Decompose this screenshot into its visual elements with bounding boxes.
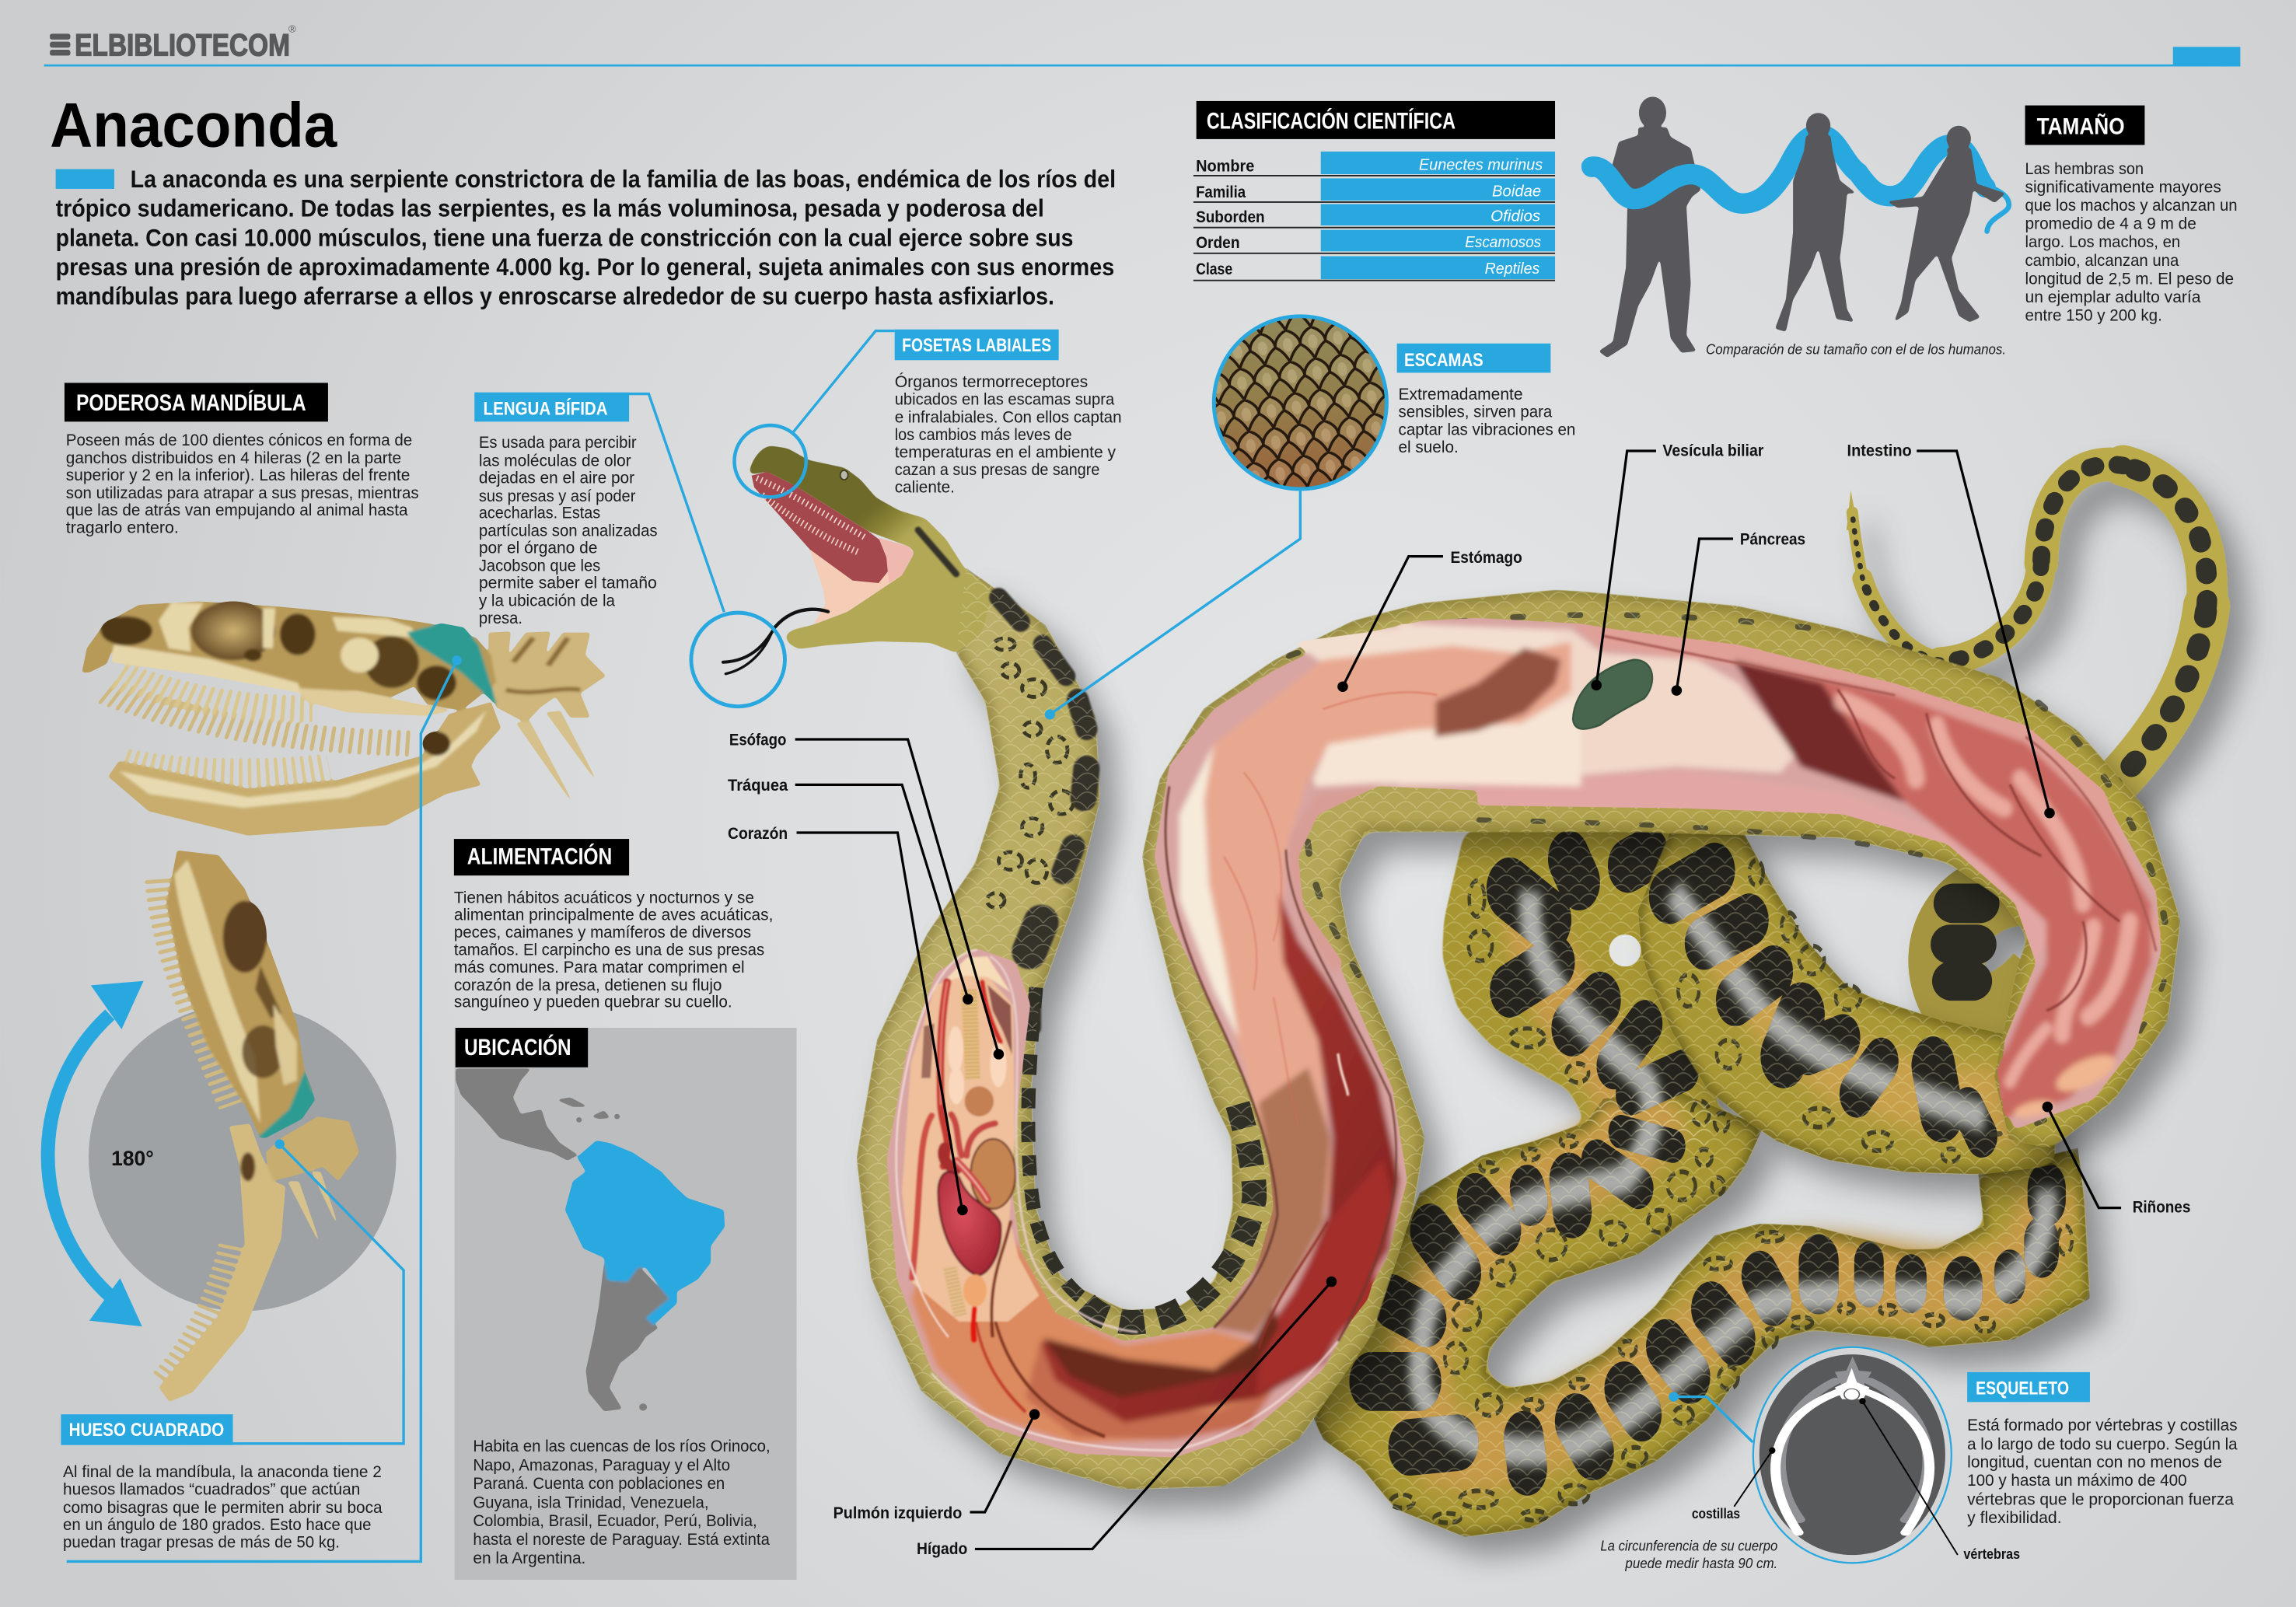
gallbladder: [1573, 659, 1652, 729]
rotation disc: [89, 1004, 396, 1311]
right body tissues: [1399, 624, 2161, 1120]
tamaño text: longitud de 2,5 m. El peso de: [2025, 269, 2234, 288]
label: hígado: Hígado: [917, 1540, 967, 1558]
front body ribbon: [857, 568, 2180, 1489]
fosetas heading: [895, 330, 1059, 360]
map: habitat range: [565, 1141, 725, 1325]
warm spine: [1693, 873, 2020, 1108]
membrane bright line: [896, 950, 977, 1337]
label: intestino: [1847, 442, 2055, 819]
eye socket: [191, 601, 275, 660]
palate: [752, 472, 889, 583]
upper cream tissue: [943, 956, 1011, 993]
quadrate open leader: [233, 1140, 404, 1444]
lengua text: Es usada para percibir: [479, 433, 637, 452]
panel: escamas: [1045, 316, 1575, 720]
lengua heading text: LENGUA BÍFIDA: [484, 398, 608, 420]
lower tooth row: [124, 763, 330, 773]
mandíbula text: que las de atrás van empujando al animal hasta: [66, 501, 408, 519]
tamaño text: entre 150 y 200 kg.: [2025, 306, 2162, 324]
intro text: planeta. Con casi 10.000 músculos, tiene una fuerza de constricción con la cual ejerce sobre sus: [56, 224, 1073, 251]
membrane right line: [990, 956, 1138, 1332]
upper teeth: [757, 478, 865, 538]
lower cavity shade: [1026, 1342, 1274, 1440]
label: vesícula biliar: Vesícula biliar: [1662, 442, 1763, 460]
mandíbula text: tragarlo entero.: [66, 518, 179, 536]
lower stomach shade: [1214, 1067, 1330, 1335]
lower jaw highlight: [119, 711, 486, 808]
skull socket shades: [223, 901, 284, 1078]
fosetas text: caliente.: [895, 478, 955, 497]
scale texture: [1638, 826, 2055, 1174]
escamas text: captar las vibraciones en: [1399, 420, 1575, 438]
hueso text: Al final de la mandíbula, la anaconda tiene 2: [63, 1462, 382, 1481]
ubicación text: Habita en las cuencas de los ríos Orinoco,: [473, 1437, 771, 1455]
intestine folds: [1843, 701, 2130, 1082]
upper teeth: [162, 879, 234, 1105]
table rows: Clase: [1196, 260, 1232, 278]
map: caribbean islands: [556, 1097, 620, 1123]
panel: hueso cuadrado: [48, 851, 404, 1552]
label: esófago: [729, 732, 1004, 1060]
cross-section caption: puede medir hasta 90 cm.: [1624, 1556, 1777, 1571]
panel: esqueleto: [1600, 1347, 2238, 1571]
great vessel: [943, 1148, 987, 1200]
table rows: [1193, 152, 1555, 281]
lower coil strand: [1314, 830, 2090, 1537]
skull bright patch: [274, 1004, 297, 1085]
intro bullet: [56, 169, 114, 189]
alimentación heading text: ALIMENTACIÓN: [467, 843, 612, 869]
blotch highlights: [1420, 892, 2046, 1451]
jaw socket open: [240, 1152, 255, 1181]
heading text: CLASIFICACIÓN CIENTÍFICA: [1207, 108, 1456, 134]
intro text: trópico sudamericano. De todas las serpientes, es la más voluminosa, pesada y poderosa del: [56, 195, 1044, 222]
hueso heading: [61, 1414, 233, 1445]
front tooth row: [119, 676, 313, 709]
stomach: [1204, 642, 1571, 1335]
quadrate teal open: [258, 1071, 315, 1138]
neck rosette spots: [987, 638, 1073, 908]
label: costillas: [1692, 1448, 1775, 1521]
panel: tamaño comparison: [1581, 96, 2238, 358]
strand body: [1314, 830, 2090, 1537]
table rows: Escamosos: [1465, 234, 1541, 251]
ubicación text: hasta el noreste de Paraguay. Está extinta: [473, 1530, 770, 1549]
chest cavity: [902, 974, 1040, 1322]
angle label: 180°: [111, 1147, 154, 1170]
lower jaw open: [159, 1123, 285, 1402]
hole in coil: [1609, 935, 1641, 966]
fosetas text: [895, 372, 1122, 497]
heart: [938, 1172, 1001, 1276]
hueso text: como bisagras que le permiten abrir su boca: [63, 1498, 383, 1517]
eye: [840, 470, 848, 480]
kidneys: [2013, 1047, 2119, 1120]
mandíbula text: ganchos distribuidos en 4 hileras (2 en la parte: [66, 449, 401, 467]
label: costillas: costillas: [1692, 1505, 1740, 1521]
label: páncreas: Páncreas: [1740, 531, 1805, 549]
lengua text: por el órgano de: [479, 539, 597, 557]
hueso text: [63, 1462, 383, 1552]
dark blotches: [1669, 871, 1982, 1137]
lower trachea: [942, 1267, 966, 1316]
tamaño text: cambio, alcanzan una: [2025, 251, 2179, 270]
label: páncreas: [1672, 531, 1805, 696]
lengua text: y la ubicación de la: [479, 591, 615, 610]
logo text: ELBIBLIOTECOM: [75, 29, 290, 63]
liver lobe: [1256, 1159, 1395, 1394]
cross-section outer ring: [1753, 1347, 1952, 1563]
mandíbula text: son utilizadas para atrapar a sus presas, mientras: [66, 484, 419, 502]
cranium: [82, 601, 496, 711]
label: hígado: [917, 1277, 1337, 1558]
lower teeth: [162, 1246, 232, 1382]
vessel wall: [991, 1221, 1011, 1337]
crossing coil strand: [1638, 826, 2055, 1174]
fosetas text: e infralabiales. Con ellos captan: [895, 407, 1122, 426]
quadrate leader line: [67, 655, 462, 1561]
tamaño text: que los machos y alcanzan un: [2025, 196, 2238, 215]
rosette spots: [1390, 881, 2072, 1523]
label: vértebras: vértebras: [1963, 1546, 2020, 1562]
warm spine: [1421, 896, 2046, 1452]
alimentación text: más comunes. Para matar comprimen el: [454, 958, 745, 976]
lengua text: las moléculas de olor: [479, 451, 631, 470]
esqueleto text: y flexibilidad.: [1967, 1508, 2062, 1527]
mandíbula text: Poseen más de 100 dientes cónicos en forma de: [66, 431, 412, 449]
ubicación text: Napo, Amazonas, Paraguay y el Alto: [473, 1455, 730, 1474]
atrium: [971, 1139, 1015, 1209]
lower wall left: [1288, 786, 1378, 976]
alimentación text: [454, 888, 773, 1011]
snake head and front body: [857, 568, 2180, 1489]
jaw socket: [423, 732, 450, 756]
ubicación text: en la Argentina.: [473, 1549, 585, 1567]
fosetas text: cazan a sus presas de sangre: [895, 460, 1099, 479]
fosetas leader: [792, 331, 895, 433]
alimentación text: corazón de la presa, detienen su flujo: [454, 976, 722, 994]
blotch highlights: [1673, 892, 1985, 1118]
label: corazón: [728, 825, 968, 1215]
escamas text: [1399, 385, 1575, 456]
alimentación text: tamaños. El carpincho es una de sus presas: [454, 941, 764, 959]
edge shading: [1314, 1089, 2090, 1537]
map: central america: [456, 1068, 578, 1161]
tamaño text: Las hembras son: [2025, 159, 2144, 178]
alimentación heading: [454, 839, 629, 875]
lower teeth: [762, 495, 858, 552]
esqueleto text: a lo largo de todo su cuerpo. Según la: [1967, 1434, 2238, 1453]
lower cavity base: [911, 1243, 1278, 1444]
forked tongue: [723, 610, 828, 674]
skull shading: [101, 613, 456, 700]
snake tail: [1847, 464, 2207, 798]
stomach wall highlight: [1179, 744, 1239, 1039]
alimentación text: peces, caimanes y mamíferos de diversos: [454, 923, 751, 941]
strand pattern: [1314, 830, 2090, 1537]
lower organ: [963, 1274, 987, 1307]
vertebrae open: [266, 1116, 359, 1181]
fosetas text: temperaturas en el ambiente y: [895, 442, 1116, 461]
human silhouettes 2 and 3: [1775, 113, 2005, 332]
maxilla: [112, 645, 302, 693]
maxilla bright: [174, 860, 260, 1123]
skull side view: [82, 601, 606, 836]
dark tissue left: [921, 1024, 935, 1078]
esqueleto text: 100 y hasta un máximo de 400: [1967, 1471, 2187, 1490]
ribbon scale texture: [857, 568, 2180, 1489]
panel: fosetas labiales: [734, 330, 1122, 497]
fosetas heading text: FOSETAS LABIALES: [902, 336, 1051, 356]
crossing body: [1638, 826, 2055, 1174]
label: vértebras: [1859, 1398, 2020, 1562]
label: intestino: Intestino: [1847, 442, 1912, 460]
pale tissue: [1399, 624, 1796, 784]
table rows: Nombre: [1196, 157, 1254, 175]
top pale band: [1293, 625, 1555, 663]
fosetas text: ubicados en las escamas supra: [895, 390, 1114, 409]
esqueleto text: [1967, 1416, 2238, 1527]
map: falklands: [639, 1403, 647, 1411]
panel: alimentación: [454, 839, 773, 1011]
cross-section caption: La circunferencia de su cuerpo: [1600, 1538, 1777, 1553]
upper tissue: [1313, 695, 1581, 786]
liver: [1040, 892, 1400, 1423]
lengua text: Jacobson que les: [479, 556, 600, 575]
lengua text: dejadas en el aire por: [479, 468, 634, 487]
small back strand: [1946, 887, 2043, 1012]
cross-section ribs and vertebra: [1776, 1357, 1930, 1532]
intestine base: [1733, 659, 2151, 1118]
arteries: [912, 982, 1001, 1340]
table rows: Eunectes murinus: [1419, 156, 1543, 173]
organ leader lines: [728, 442, 2190, 1558]
dark blotches: [1371, 854, 2046, 1469]
edge shading: [1638, 826, 2055, 1174]
label: estómago: Estómago: [1451, 549, 1522, 567]
chest organs: [896, 950, 1138, 1340]
registered mark: ®: [288, 23, 296, 34]
upper wall: [1571, 624, 2161, 963]
escamas heading: [1397, 344, 1550, 372]
esqueleto text: longitud, cuentan con no menos de: [1967, 1452, 2222, 1471]
lengua text: sus presas y así poder: [479, 487, 635, 505]
cutaway membrane: [886, 618, 2161, 1458]
table rows: Orden: [1196, 234, 1240, 252]
escamas heading text: ESCAMAS: [1404, 351, 1483, 371]
tamaño heading text: TAMAÑO: [2037, 113, 2125, 139]
lungs: [948, 1026, 1007, 1105]
dark tissue right: [987, 985, 1012, 1055]
fangs open: [288, 1172, 341, 1251]
lengua text: acecharlas. Estas: [479, 504, 600, 522]
neck dark patches: [918, 530, 1086, 1028]
intro text: La anaconda es una serpiente constrictora de la familia de las boas, endémica de los ríos del: [131, 166, 1116, 193]
upper skull: [166, 851, 313, 1138]
left coil tissues: [911, 625, 1581, 1444]
ubicación text: Colombia, Brasil, Ecuador, Perú, Bolivia,: [473, 1511, 757, 1530]
skull highlights: [159, 603, 417, 672]
ubicación heading: [456, 1028, 588, 1067]
hueso text: puedan tragar presas de más de 50 kg.: [63, 1533, 340, 1552]
intro text: presas una presión de aproximadamente 4.000 kg. Por lo general, sujeta animales con sus enormes: [56, 253, 1114, 281]
intro paragraph: [56, 166, 1116, 310]
header tab: [2173, 47, 2240, 66]
snake head: [749, 445, 993, 653]
vertebra shading: [506, 638, 580, 692]
ubicación heading text: UBICACIÓN: [464, 1034, 571, 1060]
crossing markings: [1638, 826, 2055, 1174]
ubicación text: [473, 1437, 771, 1567]
back tooth row: [107, 692, 411, 743]
label: pulmón izquierdo: Pulmón izquierdo: [833, 1504, 962, 1522]
cutaway anatomy: [728, 442, 2190, 1558]
lengua text: [479, 433, 658, 627]
esqueleto heading: [1967, 1372, 2090, 1402]
tamaño text: [2025, 159, 2238, 324]
lengua text: partículas son analizadas: [479, 522, 658, 540]
mandíbula text: [66, 431, 419, 536]
lower wall: [1477, 770, 2049, 963]
label: estómago: [1337, 549, 1522, 692]
inner rim bands: [1028, 987, 1254, 1322]
intro text: mandíbulas para luego aferrarse a ellos y enroscarse alrededor de su cuerpo hasta asfixiarlos.: [56, 283, 1054, 310]
ribbon rim spots: [1288, 615, 2167, 1134]
tongue leader: [628, 394, 724, 612]
tamaño text: largo. Los machos, en: [2025, 232, 2180, 251]
panel: ubicación: [455, 1028, 797, 1580]
cross-section body: [1760, 1354, 1945, 1555]
dark cavity: [1043, 1306, 1278, 1398]
heading bar: [1197, 101, 1555, 139]
trachea: [960, 990, 980, 1079]
tamaño text: significativamente mayores: [2025, 178, 2221, 197]
panel: lengua bífida: [474, 393, 785, 707]
scales circle ring: [1214, 316, 1386, 489]
table rows: Reptiles: [1485, 260, 1539, 278]
snake illustration: [48, 316, 2238, 1580]
fangs: [515, 711, 600, 811]
mouth floor: [810, 550, 902, 624]
alimentación text: alimentan principalmente de aves acuáticas,: [454, 906, 773, 924]
mandíbula heading text: PODEROSA MANDÍBULA: [76, 390, 306, 416]
label: tráquea: Tráquea: [728, 777, 788, 795]
fosetas circle: [734, 425, 806, 497]
esqueleto text: Está formado por vértebras y costillas: [1967, 1416, 2238, 1434]
alimentación text: Tienen hábitos acuáticos y nocturnos y se: [454, 888, 754, 907]
palate bar: [298, 688, 452, 716]
intro text: [56, 166, 1116, 310]
esqueleto heading text: ESQUELETO: [1976, 1379, 2069, 1399]
cutaway inner lines: [931, 636, 2156, 1451]
ubicación background: [455, 1028, 797, 1580]
tamaño text: un ejemplar adulto varía: [2025, 288, 2201, 306]
ubicación text: Paraná. Cuenta con poblaciones en: [473, 1474, 725, 1493]
lengua text: presa.: [479, 609, 522, 627]
label: tráquea: [728, 777, 973, 1004]
map: south cone: [585, 1263, 669, 1411]
ribbon edge shading: [857, 568, 2180, 1489]
label: pulmón izquierdo: [833, 1409, 1040, 1522]
table rows: Suborden: [1196, 208, 1265, 226]
hueso heading text: HUESO CUADRADO: [69, 1420, 224, 1441]
tamaño heading: [2025, 106, 2144, 145]
throat pink: [879, 538, 914, 583]
escamas text: el suelo.: [1399, 438, 1459, 456]
tamaño text: promedio de 4 a 9 m de: [2025, 215, 2196, 233]
lower jaw: [108, 702, 501, 836]
thymus block: [965, 1086, 994, 1116]
mouth interior: [752, 470, 914, 624]
lengua heading: [474, 393, 629, 421]
panel: poderosa mandíbula: [65, 383, 606, 1561]
esqueleto text: vértebras que le proporcionan fuerza: [1967, 1490, 2234, 1508]
label: corazón: Corazón: [728, 825, 788, 843]
intestine shadow: [1733, 659, 1906, 802]
scales leader: [1045, 489, 1300, 720]
panel: clasificación científica: [1193, 101, 1555, 281]
logo icon: [50, 33, 70, 56]
tongue circle: [691, 613, 785, 707]
scale texture upper lobe: [1442, 830, 1742, 1146]
vertebrae: [488, 631, 606, 723]
label: esófago: Esófago: [729, 732, 786, 749]
skull open view: [159, 851, 359, 1402]
table rows: Boidae: [1492, 183, 1541, 200]
quadrate bone teal: [407, 624, 497, 705]
ubicación text: Guyana, isla Trinidad, Venezuela,: [473, 1493, 709, 1511]
table rows: Ofidios: [1490, 208, 1540, 225]
label: riñones: Riñones: [2133, 1198, 2190, 1216]
scales image: [1214, 316, 1386, 489]
header: [44, 23, 2240, 66]
brown stomach chamber: [1435, 648, 1560, 737]
blue snake silhouette: [1581, 134, 2009, 232]
fosetas text: los cambios más leves de: [895, 425, 1072, 444]
table rows: Familia: [1196, 183, 1246, 201]
cross-section caption: [1600, 1538, 1777, 1571]
hueso text: en un ángulo de 180 grados. Esto hace que: [63, 1515, 371, 1534]
human silhouette 1: [1599, 96, 1701, 358]
rotation arrow: [48, 981, 144, 1326]
header rule: [44, 65, 2240, 66]
comparison caption: Comparación de su tamaño con el de los humanos.: [1706, 342, 2006, 358]
title: Anaconda: [50, 90, 337, 160]
alimentación text: sanguíneo y pueden quebrar su cuello.: [454, 993, 732, 1011]
escamas text: sensibles, sirven para: [1399, 403, 1552, 421]
rosette spots: [1678, 861, 1959, 1162]
cross-section leader: [1669, 1392, 1753, 1442]
fosetas text: Órganos termorreceptores: [895, 372, 1088, 391]
mandíbula heading: [65, 383, 328, 421]
escamas text: Extremadamente: [1399, 385, 1523, 403]
hueso text: huesos llamados “cuadrados” que actúan: [63, 1480, 360, 1499]
lengua text: permite saber el tamaño: [479, 574, 657, 592]
snake markings on neck and rims: [857, 530, 2180, 1489]
cutaway tissue base: [886, 618, 2161, 1458]
scale texture: [1314, 1089, 2090, 1537]
mandíbula text: superior y 2 en la inferior). Las hileras del frente: [66, 466, 410, 484]
label: vesícula biliar: [1591, 442, 1763, 690]
map: [456, 1068, 725, 1411]
label: riñones: [2043, 1102, 2190, 1216]
